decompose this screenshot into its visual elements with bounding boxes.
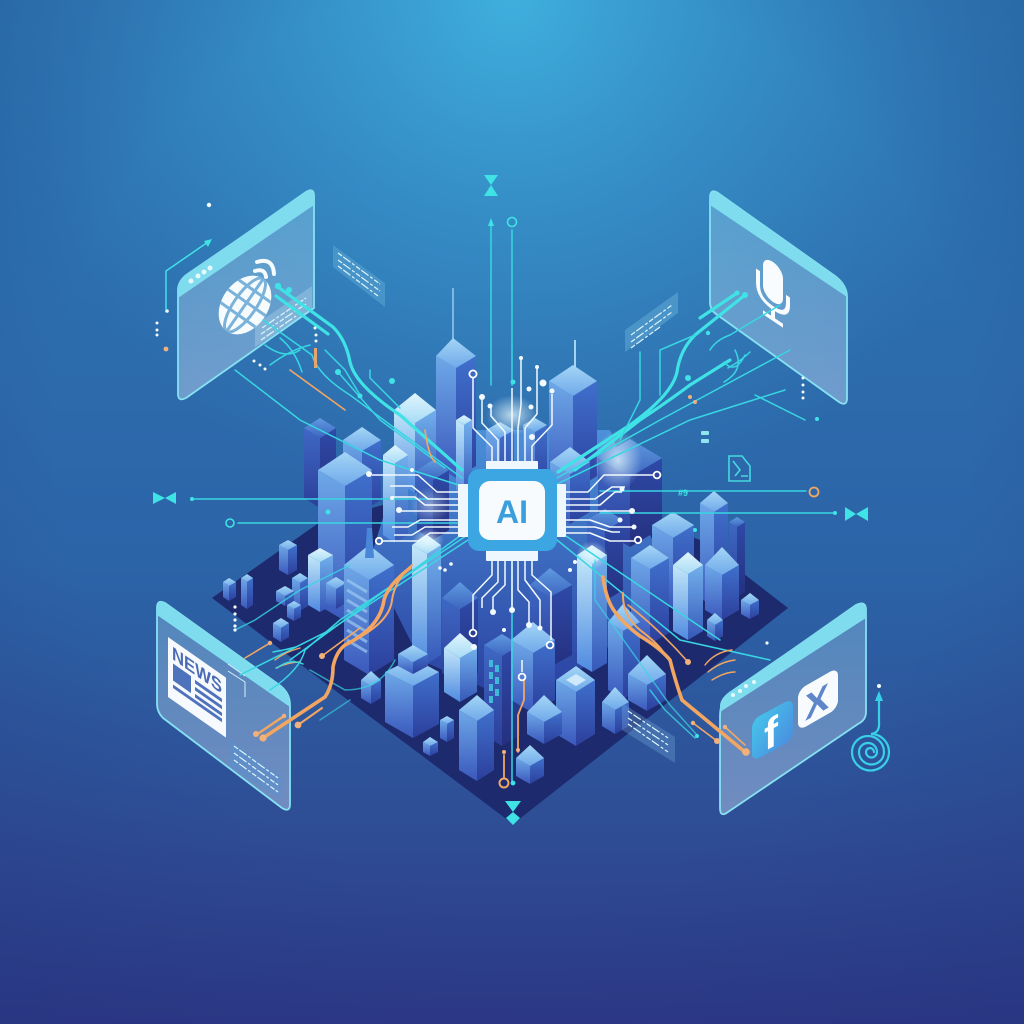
chip label: AI xyxy=(496,494,528,530)
tower windows xyxy=(489,660,499,703)
icon: top hourglass marker xyxy=(484,175,498,196)
chip pins xyxy=(458,461,566,561)
bracket marks xyxy=(228,664,245,697)
icon: microphone xyxy=(758,252,788,329)
arrow: left corner elbow xyxy=(166,239,212,310)
circuit rings and accents xyxy=(226,218,818,788)
data lines: thin cyan lines xyxy=(192,225,835,783)
icon: X tile: X xyxy=(805,676,829,729)
coloured data nodes xyxy=(164,283,837,785)
icon: spiral with arrow xyxy=(852,691,889,771)
icon: facebook tile xyxy=(752,698,793,767)
panel header bar xyxy=(157,602,290,707)
city ground platform xyxy=(212,470,788,824)
isometric city buildings xyxy=(223,288,759,784)
icon: facebook tile: f xyxy=(764,705,779,761)
floating text cards xyxy=(333,245,678,763)
panel: social media xyxy=(720,603,866,814)
rooftop light xyxy=(566,674,586,686)
icon: X tile xyxy=(798,667,838,733)
panel header bar xyxy=(178,191,314,298)
small status bars xyxy=(701,431,709,443)
panel header bar xyxy=(720,603,866,712)
data lines: orange curves xyxy=(245,370,745,778)
circuit node dots xyxy=(156,203,881,688)
text card on panel xyxy=(230,740,282,800)
icon: globe xyxy=(218,276,272,334)
chip inner face xyxy=(479,481,545,540)
panel: web globe xyxy=(178,190,314,399)
mist glow over city xyxy=(410,395,642,569)
tower spire xyxy=(365,528,374,558)
hash label: #9 xyxy=(678,488,688,498)
icon: signal arcs xyxy=(255,261,274,277)
arrow: up from chip xyxy=(488,218,494,226)
chip body xyxy=(468,469,557,551)
icon: bottom hourglass marker xyxy=(505,801,521,825)
AI chip xyxy=(458,461,566,561)
text card on panel xyxy=(255,286,312,347)
icon: left bowtie marker xyxy=(153,492,176,504)
panel header bar xyxy=(710,192,847,297)
dense city core behind chip xyxy=(370,430,660,700)
panel: microphone xyxy=(710,191,847,404)
window dots xyxy=(188,266,212,284)
panel: news xyxy=(157,602,290,810)
data lines: thick cyan curves xyxy=(276,287,745,472)
window dots xyxy=(731,680,756,697)
icon: document glyph xyxy=(729,456,750,481)
tower stripes xyxy=(347,580,367,652)
circuit traces around chip xyxy=(372,358,654,672)
icon: right bowtie marker xyxy=(845,507,868,521)
icon: newspaper: NEWS xyxy=(172,643,222,698)
node tangles xyxy=(265,338,750,680)
icon: newspaper xyxy=(168,637,226,738)
orange dash beside globe panel xyxy=(314,348,317,368)
